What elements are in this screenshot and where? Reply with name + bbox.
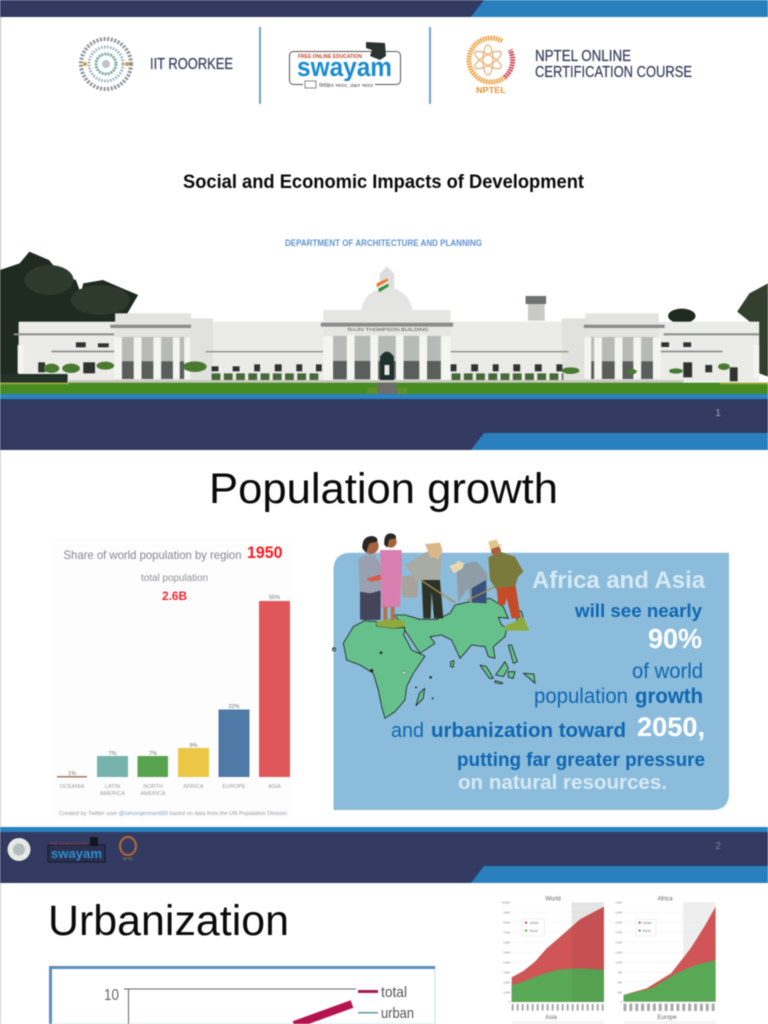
callout text: 90% (648, 623, 702, 654)
region labels: OCEANIA (60, 784, 85, 790)
logo: Swayam: swayam (297, 52, 392, 82)
person 5 with hat (488, 552, 523, 590)
area chart: Africa: Rural (643, 929, 651, 933)
slide 3 top banner (0, 866, 768, 883)
logo: NPTEL (469, 38, 692, 95)
logo: IIT Roorkee: IIT ROORKEE (150, 56, 233, 73)
region labels: LATIN (105, 784, 120, 790)
callout text: population (534, 685, 628, 708)
callout text: will see nearly (574, 601, 702, 621)
footer logos (8, 837, 136, 862)
slide 1 footer band (0, 394, 768, 450)
area chart: Africa: 2,000 (615, 920, 623, 924)
callout text: of world (632, 660, 703, 683)
bar values: 7% (149, 751, 157, 757)
region labels (60, 784, 281, 797)
inscription: RAJIV THOMPSON BUILDING (348, 328, 429, 333)
area chart: World: 4,000 (503, 960, 511, 964)
area chart: World: 7,000 (503, 930, 511, 934)
logo: Swayam: FREE ONLINE EDUCATION (298, 54, 362, 60)
dome, cupola, tower (361, 286, 412, 310)
divider right (429, 27, 431, 104)
area chart: World: 10,000 (502, 900, 511, 904)
callout text: and (391, 720, 424, 742)
recesses (120, 336, 656, 379)
area chart: World (502, 897, 605, 1007)
area chart: World: 6,000 (503, 940, 511, 944)
door (380, 352, 394, 381)
illustration: farmers (358, 533, 523, 620)
bar chart: share of world population 1950: 2.6B (162, 589, 187, 603)
area chart: Africa: 2,250 (615, 910, 623, 914)
person 3 with hat (402, 576, 418, 597)
area chart: Africa: 1,750 (615, 930, 623, 934)
area chart: Africa: 750 (618, 970, 623, 974)
person 2 (380, 550, 402, 608)
area chart: World: 8,000 (503, 920, 511, 924)
map: Africa and Asia (332, 598, 535, 718)
logo: IIT Roorkee (81, 39, 233, 89)
callout text: growth (635, 685, 703, 708)
area chart: Africa: 1,500 (615, 940, 623, 944)
area chart: World: Urban (530, 921, 539, 925)
heading: Population growth: Population growth (209, 465, 558, 513)
callout text: Africa and Asia (532, 567, 706, 594)
bar values: 55% (269, 595, 280, 601)
department subtitle: DEPARTMENT OF ARCHITECTURE AND PLANNING (285, 238, 482, 249)
area chart: Africa: 250 (618, 990, 623, 994)
region labels: AMERICA (100, 791, 125, 797)
bar chart: share of world population 1950: total population (141, 573, 208, 584)
callout text: on natural resources. (458, 772, 667, 794)
callout text (391, 567, 706, 794)
chart titles: Asia and Europe (512, 1015, 716, 1024)
bar chart: share of world population 1950 (52, 538, 292, 820)
bars (57, 601, 290, 778)
line chart: urbanization: urban (381, 1005, 414, 1022)
bar values: 7% (109, 751, 117, 757)
bar chart: share of world population 1950: 1950 (247, 544, 282, 562)
person 1 (360, 590, 381, 620)
bar values: 22% (228, 704, 240, 710)
heading: Urbanization: Urbanization (48, 897, 289, 945)
photo: main building (0, 252, 768, 394)
area chart: Africa: 2,500 (615, 900, 623, 904)
region labels: NORTH (143, 784, 163, 790)
logo: NPTEL: NPTEL (476, 85, 506, 95)
footer logos: swayam (51, 846, 102, 861)
chart titles: Asia and Europe: Europe (657, 1015, 677, 1021)
footer logos: FREE ONLINE EDUCATION (50, 842, 88, 846)
line chart: urbanization: total (381, 984, 407, 1001)
footer logos: NPTEL (122, 857, 134, 861)
region labels: AMERICA (140, 791, 166, 797)
area chart: World: 5,000 (503, 950, 511, 954)
slide 2 footer band: 2 (715, 841, 721, 852)
logo: NPTEL: NPTEL ONLINE (535, 48, 631, 65)
callout text: 2050, (637, 712, 705, 742)
area chart: Africa: 0 (621, 1000, 623, 1004)
area chart: Africa (615, 897, 716, 1007)
person 4 bending (457, 562, 487, 603)
area chart: Africa: Urban (643, 921, 652, 925)
title: Social and Economic Impacts of Development (183, 172, 585, 193)
slide 2 top banner (0, 433, 768, 450)
logo: NPTEL: CERTIFICATION COURSE (535, 64, 692, 81)
logo: Swayam (290, 42, 400, 89)
bar values (68, 595, 280, 777)
slide 1 footer band: 1 (715, 408, 721, 419)
area chart: Africa: Africa (657, 897, 673, 903)
callout text: urbanization toward (431, 720, 626, 742)
bar values: 1% (68, 771, 76, 777)
callout text: putting far greater pressure (457, 750, 705, 771)
slide 2 footer band (0, 827, 768, 883)
logo: Swayam: शिक्षित भारत, उन्नत भारत (319, 82, 374, 88)
body (19, 322, 759, 382)
area chart: World: 0 (509, 1000, 511, 1004)
area chart: World: 3,000 (503, 970, 511, 974)
trees (0, 252, 768, 377)
windows (38, 342, 738, 381)
shrubs (0, 374, 68, 383)
area chart: World: Rural (530, 929, 538, 933)
area chart: Africa: 500 (618, 980, 623, 984)
panel: Africa and Asia callout (332, 533, 729, 810)
area chart: World: World (545, 897, 561, 903)
region labels: AFRICA (183, 784, 204, 790)
columns (18, 335, 759, 380)
line chart: urbanization (49, 966, 435, 1024)
slide 1 top banner (0, 0, 768, 17)
divider left (259, 27, 261, 104)
chart titles: Asia and Europe: Asia (545, 1015, 557, 1021)
bar values: 9% (190, 743, 198, 749)
line chart: urbanization: 10 (104, 987, 119, 1004)
area chart: World: 1,000 (503, 990, 511, 994)
bar chart: share of world population 1950: Share of world population by region (64, 548, 242, 562)
region labels: ASIA (268, 784, 281, 790)
cornices (14, 323, 759, 352)
area chart: Africa: 1,000 (615, 960, 623, 964)
region labels: EUROPE (222, 784, 246, 790)
bar chart: share of world population 1950: Created by Twitter user @simongerman600 based on data from the UN Population Division (59, 811, 287, 817)
area chart: Africa: 1,250 (615, 950, 623, 954)
lawn (0, 383, 768, 394)
area chart: World: 9,000 (503, 910, 511, 914)
area chart: World: 2,000 (503, 980, 511, 984)
